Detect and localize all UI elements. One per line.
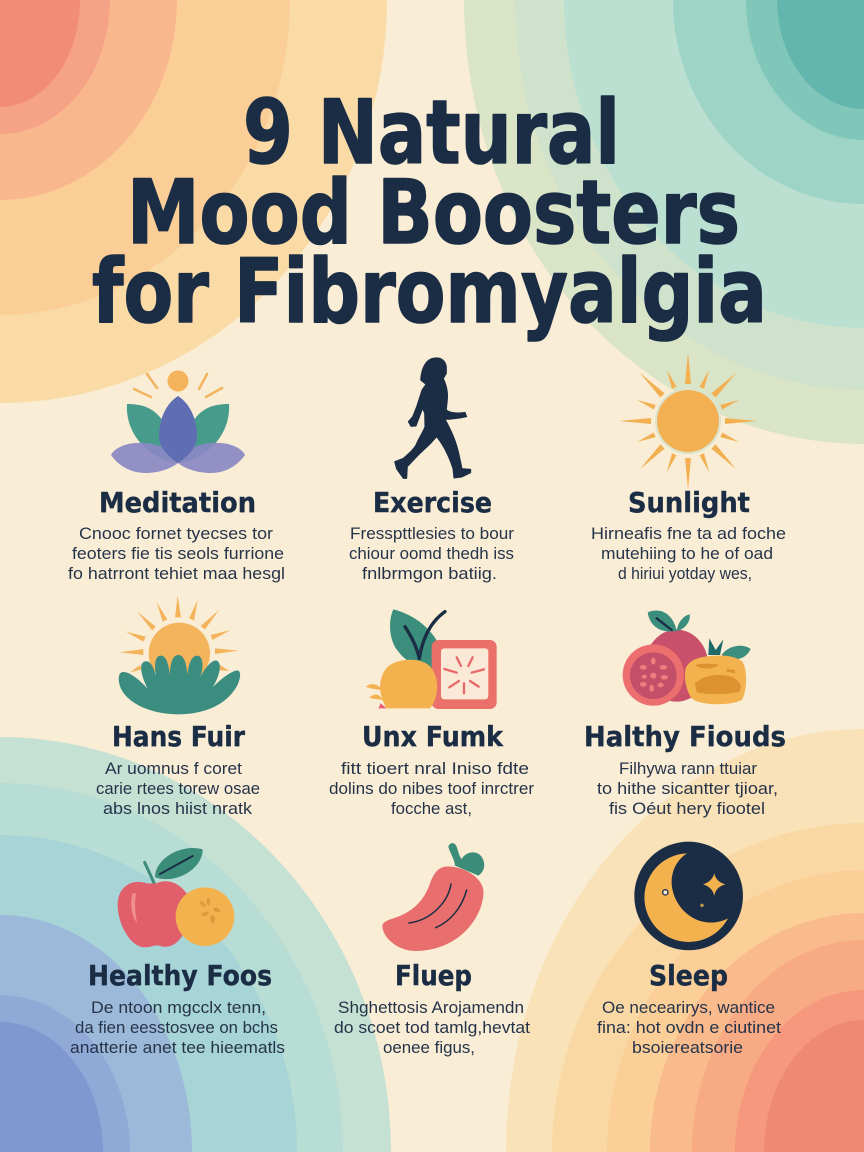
text: unx fumk description: dolins do nibes toof inrctrer <box>329 779 534 798</box>
text: unx fumk description: focche ast, <box>391 799 472 818</box>
text: exercise description: chiour oomd thedh iss <box>349 544 514 563</box>
text: sleep description: Oe necearirys, wantice <box>602 998 775 1017</box>
text: sunlight description: mutehiing to he of oad <box>601 544 773 563</box>
text: meditation description: fo hatrront tehiet maa hesgl <box>68 564 285 583</box>
text: sunlight description <box>591 524 786 583</box>
heading: healthy foos: Healthy Foos <box>88 960 272 992</box>
text: sleep description: bsoiereatsorie <box>632 1038 743 1057</box>
text: healthy foos description: De ntoon mgcclx tenn, <box>91 998 266 1017</box>
text: unx fumk description <box>329 759 534 818</box>
text: fluep description: Shghettosis Arojamendn <box>338 998 524 1017</box>
heading: sunlight: Sunlight <box>628 487 750 519</box>
text: sleep description: fina: hot ovdn e ciutinet <box>597 1018 781 1037</box>
panel: exercise <box>349 358 514 583</box>
heading: exercise: Exercise <box>373 487 492 519</box>
icon: red pepper <box>382 843 484 951</box>
text: halthy fiouds description <box>597 759 778 818</box>
text: unx fumk description: fitt tioert nral Iniso fdte <box>341 759 529 778</box>
icon: crescent moon badge <box>634 842 743 950</box>
icon: sun <box>619 352 757 490</box>
panel: sleep <box>597 842 781 1057</box>
text: fluep description: oenee figus, <box>383 1038 475 1057</box>
text: fluep description <box>334 998 530 1057</box>
heading: meditation: Meditation <box>99 487 256 519</box>
panel: hans fuir <box>96 596 260 818</box>
panel: sunlight <box>591 352 786 583</box>
panel: halthy fiouds <box>584 611 786 818</box>
text: hans fuir description: carie rtees torew osae <box>96 779 260 798</box>
heading: halthy fiouds: Halthy Fiouds <box>584 721 786 753</box>
icon: lotus with sun <box>111 370 245 473</box>
text: hans fuir description: abs lnos hiist nratk <box>103 799 253 818</box>
heading: fluep: Fluep <box>395 960 472 992</box>
text: exercise description: Fresspttlesies to bour <box>350 524 514 543</box>
text: meditation description: feoters fie tis seols furrione <box>72 544 284 563</box>
text: healthy foos description: da fien eesstosvee on bchs <box>75 1018 278 1037</box>
icon: fruit with leaf and tile <box>366 609 497 709</box>
text: halthy fiouds description: fis Oéut hery fiootel <box>609 799 765 818</box>
text: meditation description: Cnooc fornet tyecses tor <box>79 524 273 543</box>
panel: healthy foos <box>70 848 285 1057</box>
text: exercise description: fnlbrmgon batiig. <box>362 564 497 583</box>
title: 9 Natural <box>243 81 620 184</box>
text: halthy fiouds description: Filhywa rann ttuiar <box>619 759 757 778</box>
text: hans fuir description: Ar uomnus f coret <box>105 759 242 778</box>
text: healthy foos description: anatterie anet tee hieematls <box>70 1038 285 1057</box>
text: sleep description <box>597 998 781 1057</box>
text: halthy fiouds description: to hithe sicantter tjioar, <box>597 779 778 798</box>
icon: sun rising over plant <box>119 596 240 714</box>
heading: hans fuir: Hans Fuir <box>112 721 245 753</box>
icon: walking person <box>395 358 471 478</box>
title <box>92 81 767 343</box>
panel: unx fumk <box>329 609 534 818</box>
text: meditation description <box>68 524 285 583</box>
text: sunlight description: Hirneafis fne ta ad foche <box>591 524 786 543</box>
heading: sleep: Sleep <box>649 960 728 992</box>
text: hans fuir description <box>96 759 260 818</box>
text: sunlight description: d hiriui yotday wes, <box>618 564 752 583</box>
panel: meditation <box>68 370 285 583</box>
icon: apple and orange <box>118 848 234 947</box>
icon: guava and fruit group <box>623 611 751 706</box>
text: exercise description <box>349 524 514 583</box>
heading: unx fumk: Unx Fumk <box>362 721 504 753</box>
panel: fluep <box>334 843 530 1057</box>
text: fluep description: do scoet tod tamlg,hevtat <box>334 1018 530 1037</box>
title: Mood Boosters <box>127 161 740 264</box>
text: healthy foos description <box>70 998 285 1057</box>
